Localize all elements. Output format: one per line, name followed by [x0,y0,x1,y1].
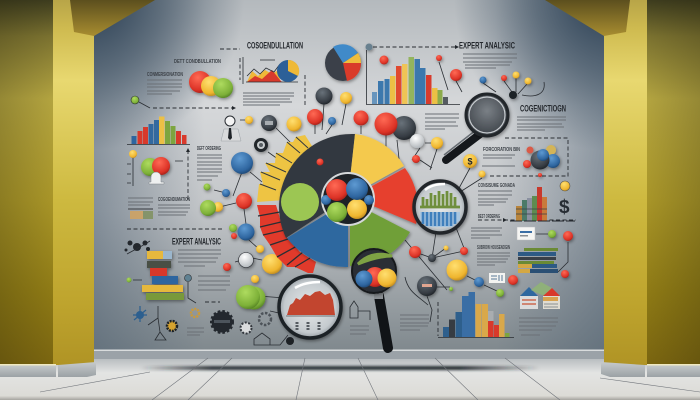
pie segment green [350,201,410,266]
stacked bar chart [510,187,575,221]
left green node [131,96,139,104]
red pin [316,158,324,166]
block stack [142,251,184,300]
magnifier with bar charts [414,181,466,233]
back wall [90,0,610,352]
gear fringe yellow [257,135,312,202]
dollar sign: $ [559,197,570,218]
text block: cogeniction [517,117,566,130]
text block: right middle: CONSISUME GONADA [478,183,515,189]
icon: small house right of lens [350,301,370,320]
small data card [489,273,505,283]
ball cluster right [523,145,560,170]
stacked horizontal bars [518,248,558,273]
gear fringe red [257,205,316,273]
icon: triangle diagram [148,306,166,340]
curved arrow [522,82,544,96]
icon: small gear [240,322,252,334]
heading: cogeniction: COGENICTIOGN [520,104,566,114]
bar chart left [127,116,190,144]
green disc [281,183,319,221]
text block: top right [463,54,517,68]
large magnifier top right [444,94,508,160]
text block: service: SUBROW HOUSENOGIN [477,245,510,251]
text block: best ordering right [471,214,502,238]
bar chart top right [366,50,460,104]
text block: right middle [478,183,515,205]
left pillar [0,0,96,377]
text block: left middle [128,197,190,219]
dashed guides [127,45,576,336]
right nodes [548,230,573,278]
top pie chart [325,44,361,81]
icon: yellow gear [167,321,177,331]
magnifier lower centre with balls [352,249,396,348]
info card [517,227,535,240]
icon: orange cog [191,309,199,317]
connector right [536,234,568,272]
text block: best ordering: DEFT ORDERING [197,146,221,152]
text block: best consolidation [147,59,221,94]
floor and skirting [0,350,700,400]
text block: centre right [425,114,459,129]
text block: left middle: COGOENDUMATION [158,197,190,203]
pie segment yellow [348,134,404,197]
left node group [200,184,282,310]
text block: best consolidation: DETT CONDBULLATION [174,59,221,65]
icon: network top left [124,240,150,254]
numbered node mark [422,284,432,287]
curved arrows lower right [405,277,428,305]
node balls centre right [354,110,542,178]
icon: house diagram [254,333,294,345]
heading: expert analysis top: EXPERT ANALYSIC [459,40,515,52]
right pillar [601,0,700,377]
dollar coin: $ [468,156,473,166]
left ceiling beam [70,0,155,36]
lower left connectors [126,274,196,303]
text block: below stack [198,276,230,290]
magnifier with red chart [279,276,341,338]
dollar coin [463,154,477,168]
icon: dark gear [212,312,232,332]
heading: expert analysis lower: EXPERT ANALYSIC [172,236,221,248]
person icon [221,116,241,141]
centre magnifier [321,173,374,225]
top left ball trio [189,71,233,98]
yellow coin [560,181,570,191]
text block: service [477,245,510,265]
node balls lower right [409,246,518,297]
pie segment dark [279,134,355,238]
text block: conversion small: FORCORATION BIN [483,147,520,153]
main pie chart [279,134,418,267]
left balance icon [127,150,183,186]
text block: best ordering right: BEST ORDERING [478,214,500,220]
top right nodes [366,44,532,99]
heading: consolidation: COSOENDULLATION [247,40,303,52]
right ceiling beam [545,0,630,36]
icon: outline gear [259,313,271,325]
pie segment red [352,168,418,224]
text block: conversion small [482,147,520,166]
text block: best ordering [197,146,222,180]
house charts [520,282,560,309]
text block: best consolidation: CONMERSIONATION [147,72,183,78]
node balls upper left [231,88,352,174]
text block: expert analysis [178,250,221,266]
area chart [243,57,299,84]
pie segment blue [287,201,348,267]
bar chart bottom [438,292,514,338]
text block: bottom items [187,315,558,335]
text block: under area chart [243,93,294,105]
icon: blue network [133,306,147,322]
connector lines [139,62,528,322]
